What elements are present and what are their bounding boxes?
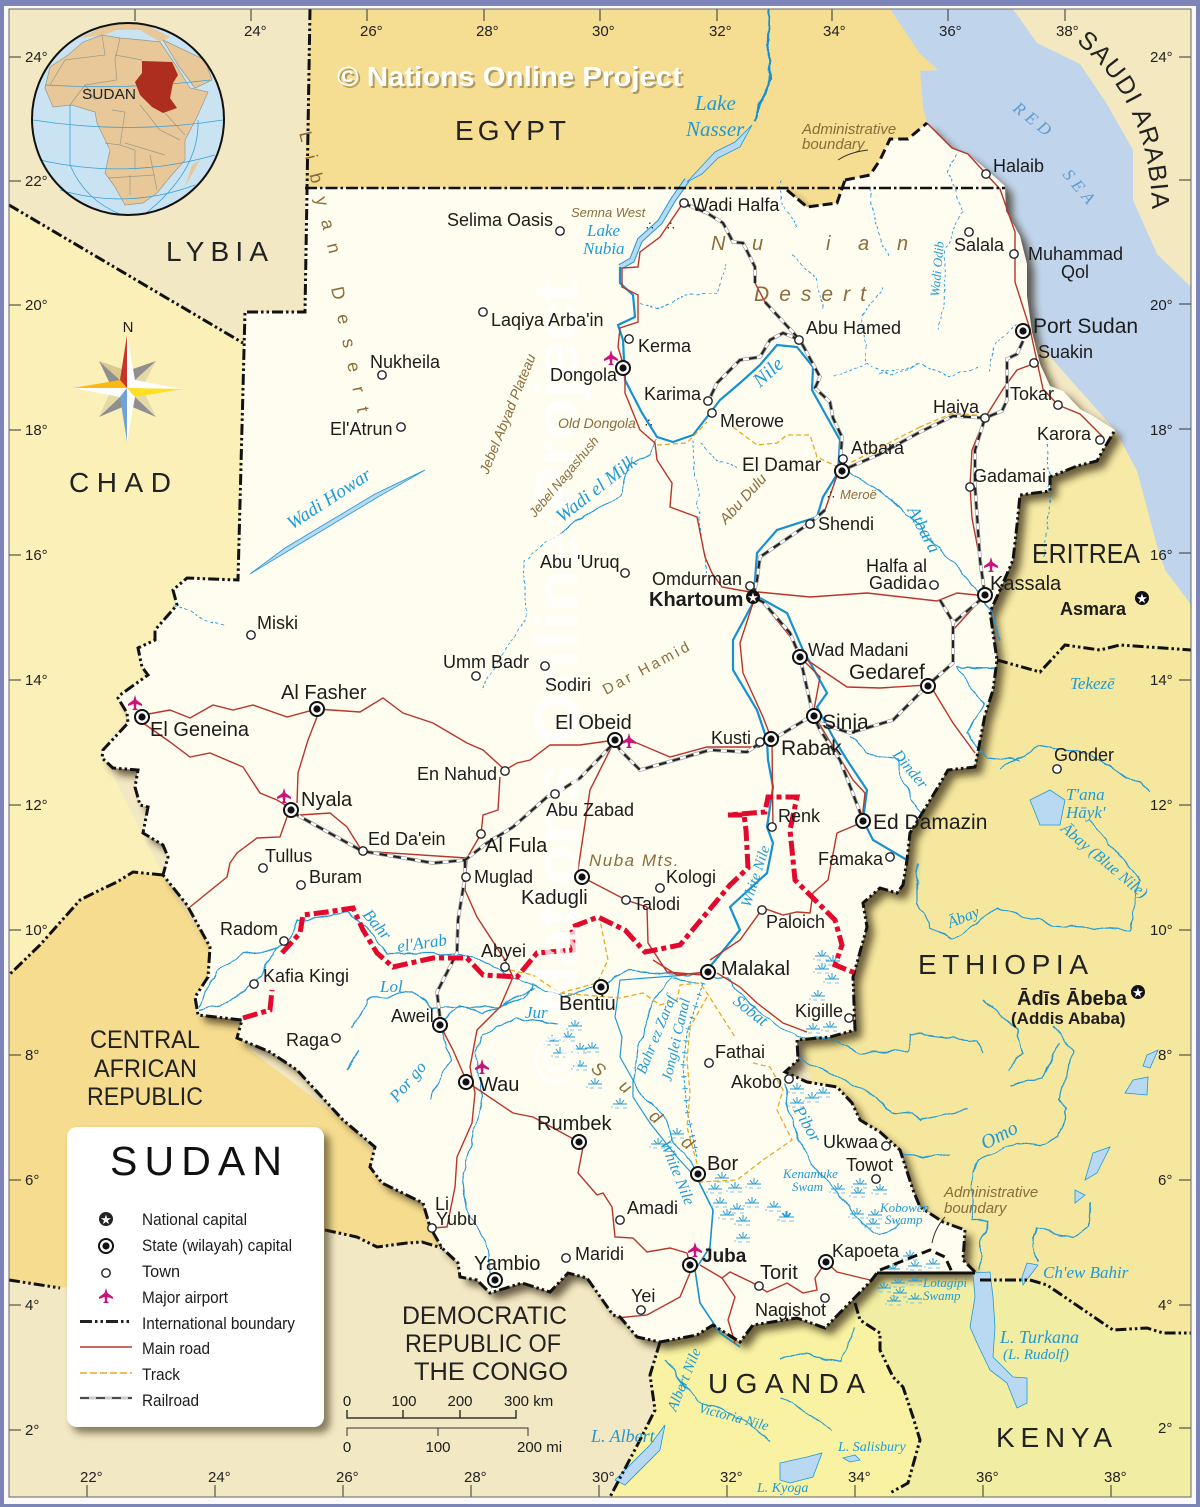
water and terrain labels: Meroë (840, 487, 877, 502)
city labels: Maridi (575, 1244, 624, 1264)
airports (128, 350, 998, 1257)
city labels: Towot (846, 1155, 893, 1175)
graticule labels: 26° (336, 1469, 359, 1486)
water and terrain labels: ∴ (646, 219, 654, 233)
water and terrain labels: Ābay (944, 903, 983, 932)
city labels: Qol (1061, 262, 1089, 282)
graticule labels: 12° (25, 797, 48, 814)
city labels: El Obeid (555, 712, 632, 734)
graticule labels: 22° (25, 173, 48, 190)
city labels: Kusti (711, 728, 751, 748)
city labels: Merowe (720, 411, 784, 431)
swamp symbols (543, 950, 940, 1305)
graticule labels: 8° (25, 1047, 39, 1064)
water and terrain labels: ∴ (827, 488, 835, 502)
city labels: Amadi (627, 1198, 678, 1218)
water and terrain labels: Victoria Nile (697, 1401, 770, 1434)
graticule labels: 34° (823, 23, 846, 40)
graticule labels: 24° (244, 23, 267, 40)
legend: major airport: Major airport (142, 1288, 228, 1307)
water and terrain labels: Administrative (943, 1184, 1038, 1201)
water and terrain labels: Semna West (571, 205, 647, 220)
country: Uganda (610, 1300, 920, 1497)
water and terrain labels: Jur (525, 1003, 548, 1022)
city labels: Kapoeta (832, 1241, 900, 1261)
country labels: REPUBLIC (87, 1083, 203, 1111)
watermark: © Nations Online Project (523, 280, 592, 1085)
graticule labels: 4° (25, 1297, 39, 1314)
graticule labels: 18° (25, 422, 48, 439)
water and terrain labels: u (615, 1076, 636, 1098)
water and terrain labels: T'ana (1066, 785, 1105, 804)
country borders on globe (50, 35, 185, 195)
city labels: Miski (257, 613, 298, 633)
city labels: Ādīs Ābeba (1017, 988, 1128, 1010)
water and terrain labels: u (752, 233, 763, 255)
country: Central African Republic (9, 872, 442, 1288)
scale bar: 300 km (504, 1393, 553, 1410)
city labels: Gonder (1054, 745, 1114, 765)
water and terrain labels: L. Salisbury (837, 1440, 906, 1455)
city labels: Selima Oasis (447, 210, 553, 230)
water and terrain labels: Swam (792, 1179, 823, 1194)
city labels: Wadi Halfa (692, 195, 780, 215)
graticule labels: 14° (1150, 672, 1173, 689)
water and terrain labels: Dar Hamid (600, 637, 695, 699)
graticule labels: 34° (848, 1469, 871, 1486)
city labels: Shendi (818, 514, 874, 534)
city labels: Sinja (822, 711, 869, 734)
country: Saudi Arabia (1013, 9, 1191, 287)
legend: national capital: National capital (142, 1210, 247, 1229)
graticule labels: 28° (476, 23, 499, 40)
scale bar: 100 (425, 1439, 451, 1456)
city labels: Muhammad (1028, 244, 1123, 264)
Africa (45, 35, 208, 205)
water and terrain labels: Jonglei Canal (659, 997, 694, 1083)
graticule labels: 12° (1150, 797, 1173, 814)
legend: track: Track (142, 1365, 180, 1384)
city labels: Kigille (795, 1001, 843, 1021)
city labels: Karima (644, 384, 702, 404)
graticule labels: 6° (1158, 1172, 1172, 1189)
water and terrain labels: Sobat (730, 991, 773, 1031)
city labels: Halfa al (866, 556, 927, 576)
water and terrain labels: Omo (977, 1117, 1022, 1154)
city labels: Torit (760, 1262, 798, 1284)
city labels: Gadida (869, 573, 928, 593)
water and terrain labels: White Nile (656, 1138, 698, 1208)
water and terrain labels: Swamp (885, 1212, 923, 1227)
city labels: Ed Da'ein (368, 829, 445, 849)
graticule labels: 6° (25, 1172, 39, 1189)
city labels: Ukwaa (823, 1132, 879, 1152)
city labels: El'Atrun (330, 419, 392, 439)
legend: track (80, 1365, 180, 1384)
country labels: LYBIA (166, 236, 268, 267)
state capital markers (135, 324, 1030, 1287)
city labels: Juba (702, 1246, 747, 1267)
water and terrain labels: d (677, 1132, 699, 1154)
country labels: ETHIOPIA (918, 949, 1088, 980)
water and terrain labels: ∴ (667, 219, 675, 233)
graticule labels: 2° (1158, 1420, 1172, 1437)
water and terrain labels: Por go (385, 1058, 430, 1106)
city labels: Yei (631, 1286, 655, 1306)
watermark: © Nations Online Project (337, 61, 682, 92)
city labels: Rumbek (537, 1113, 612, 1135)
national capital markers: ★ (1132, 985, 1144, 1000)
water and terrain labels: Wadi el Milk (552, 451, 641, 527)
city labels: Buram (309, 867, 362, 887)
city labels: Port Sudan (1033, 315, 1138, 338)
Arabia (163, 40, 212, 88)
city labels: Abu Hamed (806, 318, 901, 338)
city labels: Nukheila (370, 352, 441, 372)
country labels: KENYA (996, 1422, 1112, 1453)
water and terrain labels: Desert (754, 283, 867, 306)
country labels: AFRICAN (94, 1055, 197, 1083)
water and terrain labels: (L. Rudolf) (1003, 1347, 1069, 1363)
city labels: Dongola (550, 365, 618, 385)
country labels: UGANDA (708, 1368, 865, 1399)
water and terrain labels: Lol (379, 977, 403, 996)
city labels: Suakin (1038, 342, 1093, 362)
country: Kenya (855, 1272, 1191, 1497)
city labels (150, 156, 1138, 1320)
country labels: THE CONGO (414, 1358, 568, 1386)
city labels: Talodi (633, 894, 680, 914)
city labels: Tokar (1010, 384, 1054, 404)
country labels: EGYPT (455, 115, 566, 146)
country labels: REPUBLIC OF (405, 1330, 561, 1358)
scale bar: 0 (343, 1439, 351, 1456)
city labels: Atbara (851, 438, 905, 458)
water and terrain labels: Bahr (359, 905, 396, 944)
water and terrain labels: Nuba Mts. (589, 851, 680, 870)
city labels: Kologi (666, 867, 716, 887)
city labels: Abu 'Uruq (540, 552, 619, 572)
graticule labels: 14° (25, 672, 48, 689)
water and terrain labels: Abu Dulu (716, 470, 771, 528)
city labels: Abu Zabad (546, 800, 634, 820)
graticule labels: 4° (1158, 1297, 1172, 1314)
city labels: Raga (286, 1030, 330, 1050)
scale bar: 200 (447, 1393, 473, 1410)
water and terrain labels: i (826, 233, 831, 255)
water and terrain labels: Nubia (582, 239, 625, 258)
city labels: Famaka (818, 849, 884, 869)
water and terrain labels: Jebel Nagashush (525, 433, 602, 521)
city labels: Fathai (715, 1042, 765, 1062)
town markers (247, 170, 1104, 1314)
country labels: DEMOCRATIC (402, 1302, 567, 1330)
Madagascar (185, 160, 200, 187)
graticule labels: 30° (592, 23, 615, 40)
water and terrain labels: White Nile (739, 843, 774, 909)
water and terrain labels: L. Albert (590, 1426, 656, 1446)
graticule labels: 16° (1150, 547, 1173, 564)
main roads (143, 123, 1103, 1343)
water and terrain labels: Hāyk' (1065, 803, 1106, 822)
water and terrain labels: ∴ (645, 416, 653, 430)
water and terrain labels: Ch'ew Bahir (1043, 1263, 1129, 1282)
city labels: Kerma (638, 336, 692, 356)
city labels: Umm Badr (443, 652, 529, 672)
Sudan shadow (109, 130, 1122, 1349)
water and terrain labels: Pibor (789, 1102, 826, 1146)
city labels: Malakal (721, 958, 790, 980)
city labels: Renk (778, 806, 821, 826)
city labels: Nagishot (755, 1300, 826, 1320)
graticule labels: 2° (25, 1422, 39, 1439)
graticule labels: 18° (1150, 422, 1173, 439)
city labels: Salala (954, 235, 1005, 255)
national capital markers: ★ (747, 590, 759, 605)
legend: national capital: ★ (100, 1212, 112, 1227)
graticule labels: 38° (1104, 1469, 1127, 1486)
city labels: El Geneina (150, 719, 250, 741)
legend title: SUDAN (110, 1138, 282, 1184)
water and terrain labels: Old Dongola (558, 415, 636, 431)
South Sudan boundary (red dashed) (243, 797, 855, 1018)
water and terrain labels: Atbara (903, 502, 945, 556)
graticule labels: 10° (1150, 922, 1173, 939)
city labels: El Damar (742, 455, 822, 476)
watermark (337, 61, 684, 1085)
water and terrain labels: Dinder (888, 746, 932, 793)
graticule labels: 20° (1150, 297, 1173, 314)
city labels: Radom (220, 919, 278, 939)
water and terrain labels (283, 91, 1151, 1496)
city labels: Gedaref (849, 661, 925, 684)
city labels: Al Fasher (281, 682, 367, 704)
city labels: (Addis Ababa) (1011, 1009, 1126, 1028)
water and terrain labels: Tekezē (1070, 674, 1115, 693)
globe grid (33, 80, 223, 214)
graticule labels: 26° (360, 23, 383, 40)
city labels: Ed Damazin (873, 811, 987, 834)
graticule labels: 32° (709, 23, 732, 40)
water and terrain labels: Desert (327, 285, 373, 414)
city labels: Halaib (993, 156, 1044, 176)
graticule labels: 20° (25, 297, 48, 314)
legend: main road (80, 1339, 210, 1358)
country: Chad (9, 205, 243, 975)
country: Sudan (102, 123, 1115, 1342)
legend: town (102, 1262, 180, 1281)
country labels: SAUDI ARABIA (1079, 32, 1170, 210)
graticule labels: 28° (464, 1469, 487, 1486)
water and terrain labels: Bahr ez Zaraf (634, 992, 681, 1076)
main Nile channels (615, 267, 907, 1347)
water and terrain labels: n (897, 233, 908, 255)
legend: main road: Main road (142, 1339, 210, 1358)
water and terrain labels: a (858, 233, 869, 255)
graticule labels: 24° (1150, 49, 1173, 66)
scale bar: 0 (343, 1393, 351, 1410)
water and terrain labels: boundary (944, 1200, 1008, 1217)
city labels: Li (435, 1194, 449, 1214)
railroads (297, 203, 1023, 1018)
city labels: Nyala (301, 789, 353, 811)
water and terrain labels: d (645, 1106, 667, 1128)
water and terrain labels: S (587, 1058, 609, 1081)
water and terrain labels: Libyan (295, 129, 345, 255)
city labels: Kadugli (521, 887, 588, 909)
country: Egypt (305, 9, 938, 207)
globe locator: SUDAN (82, 87, 136, 103)
city labels: Tullus (265, 846, 312, 866)
graticule labels: 38° (1056, 23, 1079, 40)
country: Ethiopia (800, 645, 1191, 1333)
city labels: Bentiu (559, 993, 616, 1015)
scale bar (343, 1393, 562, 1456)
water and terrain labels: Albert Nile (664, 1346, 705, 1414)
water and terrain labels: L. Turkana (999, 1327, 1079, 1347)
country labels: CENTRAL (90, 1026, 200, 1054)
city labels: Abyei (481, 941, 526, 961)
graticule labels: 24° (25, 49, 48, 66)
city labels: Omdurman (652, 569, 742, 589)
water and terrain labels: boundary (802, 136, 866, 153)
graticule labels: 16° (25, 547, 48, 564)
water and terrain labels: Administrative (801, 121, 896, 138)
legend panel (67, 1127, 330, 1433)
city labels: Muglad (474, 867, 533, 887)
national capital markers (746, 590, 1149, 1000)
city labels: Al Fula (485, 835, 548, 857)
city labels: Kafia Kingi (263, 966, 349, 986)
compass rose: N (123, 319, 133, 336)
rivers (175, 9, 1150, 1440)
water and terrain labels: Kobowen (879, 1200, 929, 1215)
water and terrain labels: el'Arab (396, 930, 448, 956)
compass rose (73, 319, 182, 442)
legend: major airport (99, 1288, 228, 1307)
national capital markers: ★ (1136, 591, 1148, 606)
graticule labels: 10° (25, 922, 48, 939)
Sudan highlighted (135, 61, 178, 113)
legend: railroad: Railroad (142, 1391, 199, 1410)
tracks (510, 413, 985, 1182)
graticule labels: 30° (592, 1469, 615, 1486)
city labels: Sodiri (545, 675, 591, 695)
water and terrain labels: Jebel Abyad Plateau (476, 351, 539, 477)
water and terrain labels: SEA (1059, 165, 1102, 211)
legend: state capital: State (wilayah) capital (142, 1236, 292, 1255)
city labels: Laqiya Arba'in (491, 310, 604, 330)
water and terrain labels: Nasser (685, 117, 745, 141)
graticule labels: 36° (939, 23, 962, 40)
city labels: Rabak (781, 737, 842, 760)
city labels: Asmara (1060, 599, 1127, 619)
city labels: Karora (1037, 424, 1092, 444)
water and terrain labels: Kenamuke (782, 1166, 838, 1181)
country: Eritrea (997, 430, 1191, 672)
scale bar: 100 (391, 1393, 417, 1410)
water and terrain labels: RED (1009, 98, 1059, 143)
water and terrain labels: Ābay (Blue Nile) (1057, 819, 1151, 902)
lakes (250, 125, 1158, 1485)
city labels: Wad Madani (808, 640, 908, 660)
graticule labels: 24° (208, 1469, 231, 1486)
city labels: Bor (707, 1153, 738, 1175)
watermark: © Nations Online Project (339, 63, 684, 94)
water and terrain labels: Nile (748, 353, 788, 392)
water and terrain labels: Swamp (923, 1288, 961, 1303)
country labels: CHAD (69, 467, 171, 498)
city labels: En Nahud (417, 764, 497, 784)
scale bar: 200 mi (517, 1439, 562, 1456)
city labels: Aweil (391, 1006, 434, 1026)
city labels: Kassala (990, 573, 1062, 595)
city labels: Akobo (731, 1072, 782, 1092)
water and terrain labels: Wadi Odib (927, 240, 947, 297)
graticule labels: 22° (80, 1469, 103, 1486)
legend: national capital (99, 1210, 247, 1229)
globe locator (32, 23, 224, 215)
Europe fringe (80, 23, 170, 42)
Jonglei Canal (683, 983, 703, 1157)
city labels: Gadamai (973, 466, 1046, 486)
legend: town: Town (142, 1262, 180, 1281)
graticule labels: 8° (1158, 1047, 1172, 1064)
country labels: ERITREA (1032, 538, 1140, 569)
graticule labels: 32° (720, 1469, 743, 1486)
graticule labels: 36° (976, 1469, 999, 1486)
water and terrain labels: N (711, 233, 726, 255)
water and terrain labels: Lotagipi (922, 1275, 967, 1290)
water and terrain labels: Lake (694, 91, 736, 115)
city labels: Yambio (474, 1253, 540, 1275)
city labels: Khartoum (649, 589, 743, 611)
legend: railroad (80, 1391, 199, 1410)
city labels: Yubu (436, 1209, 477, 1229)
city labels: Haiya (933, 397, 980, 417)
Red Sea (890, 9, 1191, 605)
water and terrain labels: L. Kyoga (756, 1481, 808, 1496)
water and terrain labels: Lake (586, 221, 620, 240)
water and terrain labels: Wadi Howar (283, 464, 376, 534)
city labels: Wau (479, 1074, 519, 1096)
legend: international boundary: International boundary (142, 1314, 295, 1333)
city labels: Paloich (766, 912, 825, 932)
